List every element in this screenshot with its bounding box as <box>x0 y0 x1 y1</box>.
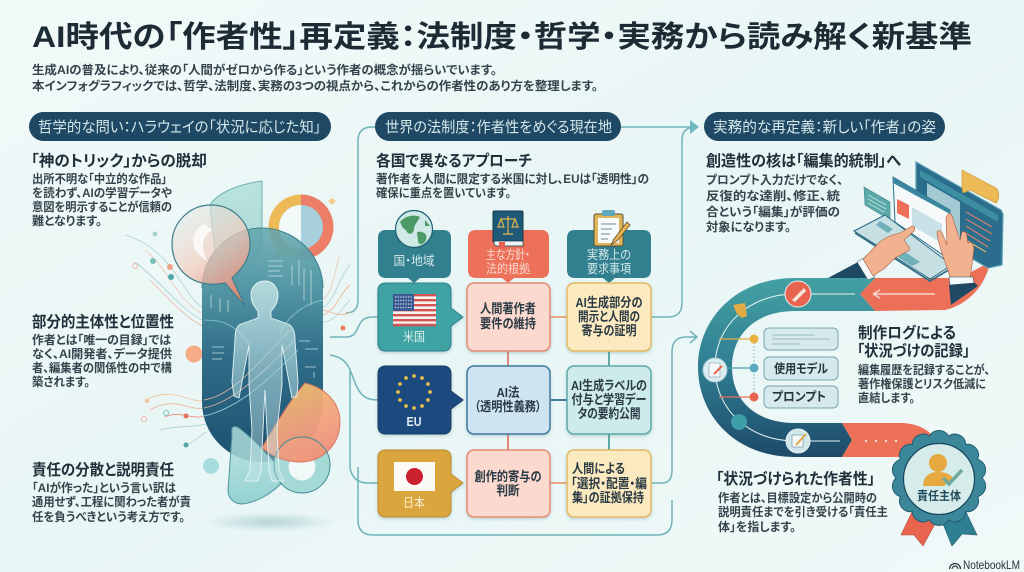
illustration: hands editing on devices <box>828 162 1003 305</box>
cell: Japan policy: 創作的寄与の <box>474 469 542 484</box>
text block: situated authorship: 作者とは、目標設定から公開時の <box>718 490 877 505</box>
text block: approaches: 著作者を人間に限定する米国に対し、EUは「透明性」の <box>376 171 649 186</box>
text block: partial agency <box>32 312 174 389</box>
heading: practical redefinition: 実務的な再定義：新しい「作者」の姿 <box>713 119 936 136</box>
text block: responsibility: 責任の分散と説明責任 <box>32 460 174 479</box>
text block: approaches: 確保に重点を置いています。 <box>376 185 511 200</box>
column header: requirements: 実務上の <box>587 247 631 262</box>
intro text: 本インフォグラフィックでは、哲学、法制度、実務の3つの視点から、これからの作者性のあり方を整理します。 <box>32 78 598 93</box>
icon: teal node <box>731 414 747 430</box>
intro text: 生成AIの普及により、従来の「人間がゼロから作る」という作者の概念が揺らいでいます。 <box>32 62 497 77</box>
panel: legal systems <box>375 112 651 517</box>
text block: approaches <box>376 151 649 200</box>
row: Japan <box>378 450 463 517</box>
cell: EU requirements: タの要約公開 <box>577 406 640 421</box>
cell: Japan requirements: 人間による <box>572 461 625 476</box>
text block: god trick: 意図を明示することが信頼の <box>32 199 172 214</box>
text block: production log: 「状況づけの記録」 <box>857 341 970 360</box>
icon: law book <box>493 211 523 249</box>
icon: responsibility badge: 責任主体 <box>917 488 961 503</box>
icon: responsibility badge <box>892 430 986 546</box>
cell: Japan requirements <box>567 450 651 517</box>
log entries: 使用モデル <box>774 361 829 376</box>
text block: situated authorship <box>716 469 888 534</box>
icon: log node <box>703 358 727 382</box>
row: Japan: 日本 <box>403 496 425 510</box>
cell: EU requirements: AI生成ラベルの <box>571 378 647 393</box>
column header: requirements: 要求事項 <box>587 262 631 276</box>
text block: partial agency: 者、編集者の関係性の中で構 <box>32 360 172 375</box>
path: S-shaped workflow band <box>698 262 990 457</box>
text block: editorial control: プロンプト入力だけでなく、 <box>706 172 843 187</box>
text block: god trick: 難となります。 <box>32 213 102 228</box>
text block: editorial control: 対象になります。 <box>706 219 791 234</box>
text block: situated authorship: 体」を指します。 <box>718 519 796 534</box>
log entries: プロンプト <box>772 390 826 404</box>
icon: Japan flag <box>394 462 435 491</box>
text block: editorial control: 合という「編集」が評価の <box>706 204 840 219</box>
icon: EU stars <box>396 374 432 410</box>
cell: US policy <box>467 283 550 351</box>
column header: policy: 法的根拠 <box>486 261 530 276</box>
cell: Japan requirements: 集」の証拠保持 <box>572 490 644 505</box>
cell: Japan requirements: 「選択・配置・編 <box>571 476 647 491</box>
cell: EU policy: （透明性義務） <box>474 399 542 414</box>
row: EU: EU <box>406 415 422 429</box>
text block: responsibility: 通用せず、工程に関わった者が責 <box>32 494 191 509</box>
column header: policy: 主な方針・ <box>486 247 530 262</box>
text block: partial agency: 作者とは「唯一の目録」では <box>32 332 171 347</box>
text block: production log: 制作ログによる <box>858 323 956 342</box>
text block: god trick <box>31 152 207 228</box>
icon: pencil node <box>785 281 811 307</box>
icon: US flag <box>393 294 436 326</box>
cell: Japan policy: 判断 <box>496 483 520 498</box>
text block: editorial control: 反復的な達削、修正、統 <box>706 188 840 203</box>
column header: policy <box>468 230 549 283</box>
cell: EU policy <box>467 366 550 434</box>
heading: practical redefinition <box>704 112 945 141</box>
log entries <box>719 328 838 408</box>
connector lines between panels <box>330 120 699 535</box>
panel: philosophy <box>29 112 350 532</box>
text block: production log: 著作権保護とリスク低減に <box>858 376 986 391</box>
cell: US requirements: AI生成部分の <box>576 295 643 310</box>
cell: Japan policy <box>467 450 550 517</box>
heading: legal systems: 世界の法制度：作者性をめぐる現在地 <box>385 119 612 136</box>
text block: god trick: 「神のトリック」からの脱却 <box>31 152 207 170</box>
text block: god trick: を読わず、AIの学習データや <box>32 185 172 200</box>
heading: legal systems <box>375 112 621 141</box>
cell: US policy: 人間著作者 <box>480 301 536 316</box>
heading: philosophy <box>29 112 331 141</box>
text block: editorial control: 創造性の核は「編集的統制」へ <box>706 151 901 170</box>
text block: responsibility: 任を負うべきという考え方です。 <box>32 509 185 524</box>
text block: production log <box>857 323 990 405</box>
heading: philosophy: 哲学的な問い：ハラウェイの「状況に応じた知」 <box>38 119 321 136</box>
cell: US policy: 要件の維持 <box>480 316 536 331</box>
text block: partial agency: 築されます。 <box>32 374 90 389</box>
icon: yellow marker <box>733 303 747 318</box>
title: AI時代の「作者性」再定義：法制度・哲学・実務から読み解く新基準 <box>32 21 972 54</box>
icon: edit node <box>786 429 810 453</box>
text block: god trick: 出所不明な「中立的な作品」 <box>32 171 167 186</box>
icon: clipboard <box>594 210 630 246</box>
table grid lines <box>508 317 609 483</box>
cell: US requirements <box>567 283 651 351</box>
intro text <box>32 62 598 93</box>
cell: EU requirements <box>567 366 651 434</box>
cell: US requirements: 開示と人間の <box>578 309 640 324</box>
text block: partial agency: なく、AI開発者、データ提供 <box>32 346 172 361</box>
text block: responsibility <box>32 460 191 524</box>
cell: EU requirements: 付与と学習デー <box>572 392 646 407</box>
row: EU <box>378 366 463 434</box>
cell: EU policy: AI法 <box>496 385 520 400</box>
text block: approaches: 各国で異なるアプローチ <box>376 151 532 170</box>
panel: practical redefinition <box>698 112 1003 546</box>
text block: editorial control <box>706 151 901 234</box>
icon: globe <box>396 210 432 248</box>
illustration: human figure in capsule <box>125 181 350 532</box>
cell: US requirements: 寄与の証明 <box>582 323 636 338</box>
column header: requirements <box>567 230 651 283</box>
text block: responsibility: 「AIが作った」という言い訳は <box>32 480 176 495</box>
row: United States <box>378 283 463 351</box>
column header: country <box>378 230 451 283</box>
text block: situated authorship: 説明責任までを引き受ける「責任主 <box>718 504 888 519</box>
text block: production log: 編集履歴を記録することが、 <box>858 362 990 377</box>
text block: production log: 直結します。 <box>858 390 915 405</box>
text block: situated authorship: 「状況づけられた作者性」 <box>716 469 875 488</box>
column header: country: 国・地域 <box>394 254 434 268</box>
row: United States: 米国 <box>403 330 425 344</box>
text block: partial agency: 部分的主体性と位置性 <box>32 312 174 331</box>
